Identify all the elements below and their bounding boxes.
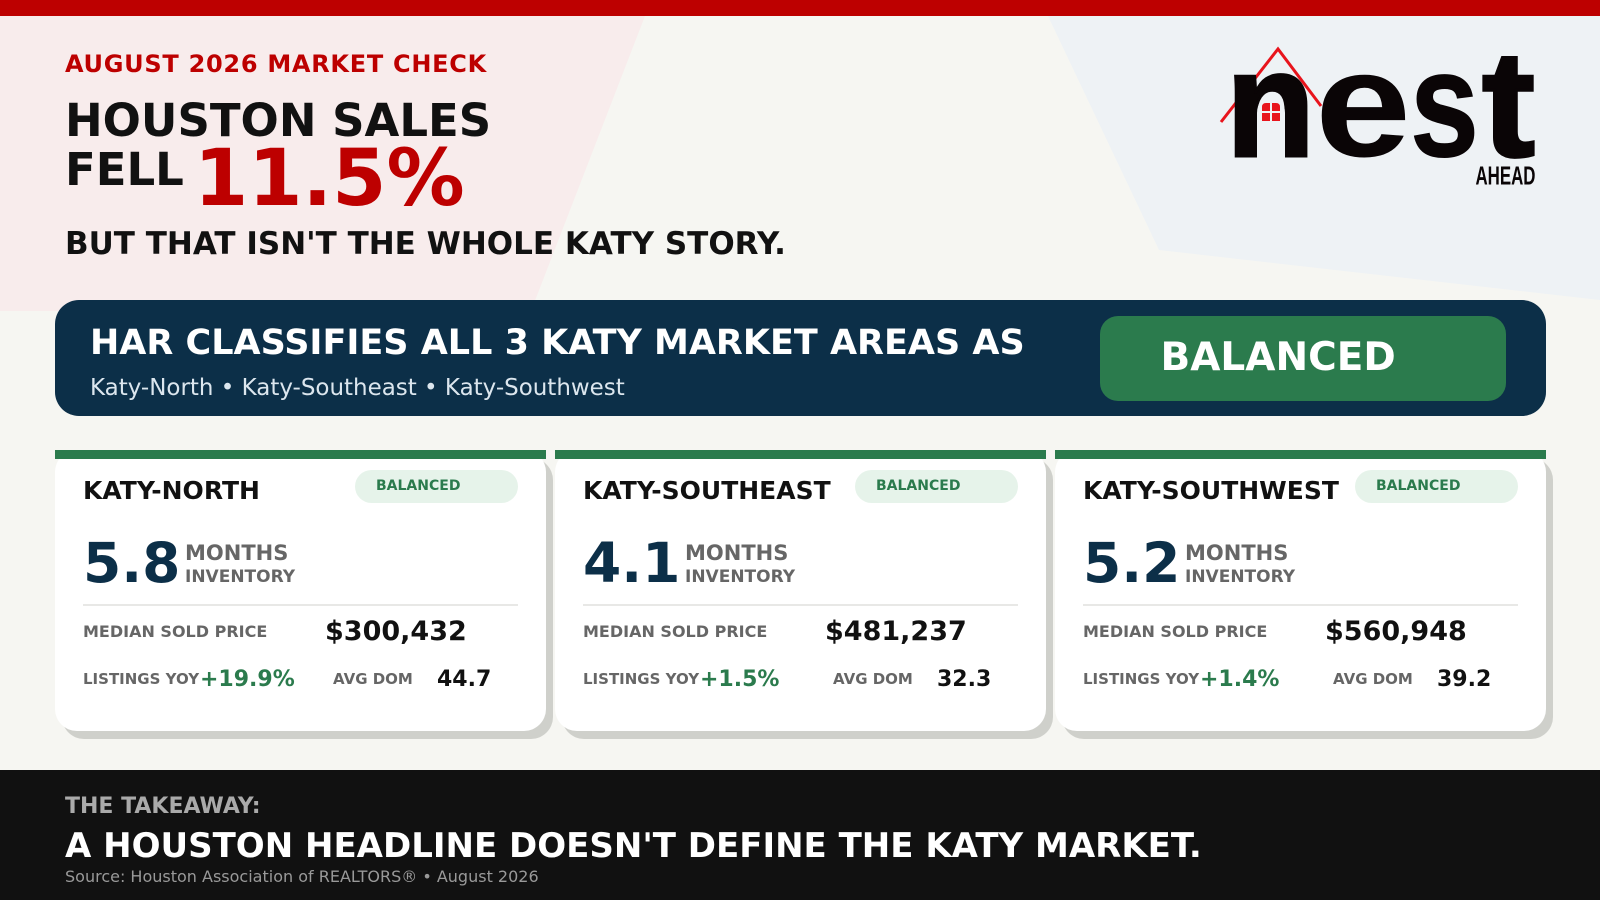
median price: [583, 605, 1018, 647]
listings yoy: LISTINGS YOY: [583, 670, 700, 688]
listings yoy: +19.9%: [200, 667, 295, 692]
average days on market: 44.7: [437, 667, 491, 692]
headline line two: FELL: [65, 143, 184, 196]
months of inventory: 4.1: [583, 531, 680, 595]
listings yoy: [1083, 667, 1279, 692]
median price: MEDIAN SOLD PRICE: [1083, 622, 1267, 641]
months of inventory: [1083, 531, 1296, 595]
balanced pill: BALANCED: [1160, 335, 1396, 380]
banner: [55, 300, 1546, 416]
top red bar: [0, 0, 1600, 16]
header text: [65, 50, 786, 262]
takeaway label: THE TAKEAWAY:: [65, 794, 261, 819]
listings yoy: [583, 667, 779, 692]
footer: [0, 770, 1600, 900]
card name: KATY-SOUTHEAST: [583, 476, 831, 505]
months of inventory: 5.2: [1083, 531, 1180, 595]
average days on market: [833, 667, 991, 692]
status pill: BALANCED: [1376, 478, 1460, 494]
status pill: [355, 470, 518, 503]
status pill: [855, 470, 1018, 503]
median price: $560,948: [1325, 616, 1467, 647]
median price: MEDIAN SOLD PRICE: [83, 622, 267, 641]
months of inventory: INVENTORY: [1185, 567, 1296, 587]
months of inventory: MONTHS: [185, 541, 288, 565]
logo tagline: AHEAD: [1476, 160, 1536, 190]
listings yoy: LISTINGS YOY: [83, 670, 200, 688]
takeaway statement: A HOUSTON HEADLINE DOESN'T DEFINE THE KATY MARKET.: [65, 826, 1202, 866]
months of inventory: MONTHS: [1185, 541, 1288, 565]
average days on market: [1333, 667, 1491, 692]
icon: door arch: [1257, 95, 1285, 160]
status pill: [1355, 470, 1518, 503]
average days on market: AVG DOM: [333, 670, 413, 688]
subheading: BUT THAT ISN'T THE WHOLE KATY STORY.: [65, 226, 786, 262]
average days on market: [333, 667, 491, 692]
status pill: BALANCED: [876, 478, 960, 494]
logo wordmark: e: [1315, 19, 1411, 188]
average days on market: 39.2: [1437, 667, 1491, 692]
median price: MEDIAN SOLD PRICE: [583, 622, 767, 641]
listings yoy: +1.4%: [1200, 667, 1279, 692]
panel: Katy-Southeast: [555, 450, 1053, 739]
months of inventory: INVENTORY: [685, 567, 796, 587]
median price: $300,432: [325, 616, 467, 647]
panel: Katy-Southwest: [1055, 450, 1553, 739]
logo wordmark: t: [1482, 19, 1535, 188]
average days on market: AVG DOM: [833, 670, 913, 688]
headline line one: HOUSTON SALES: [65, 94, 491, 147]
headline figure: 11.5%: [194, 134, 465, 224]
median price: [83, 605, 518, 647]
months of inventory: INVENTORY: [185, 567, 296, 587]
median price: $481,237: [825, 616, 967, 647]
logo: nest ahead: [1221, 19, 1536, 190]
card name: KATY-SOUTHWEST: [1083, 476, 1339, 505]
banner heading: HAR CLASSIFIES ALL 3 KATY MARKET AREAS AS: [90, 323, 1025, 363]
banner subtext: Katy-North • Katy-Southeast • Katy-Southwest: [90, 375, 625, 401]
average days on market: 32.3: [937, 667, 991, 692]
panel: Katy-North: [55, 450, 553, 739]
months of inventory: [583, 531, 796, 595]
months of inventory: MONTHS: [685, 541, 788, 565]
average days on market: AVG DOM: [1333, 670, 1413, 688]
balanced pill: [1100, 316, 1506, 401]
eyebrow: AUGUST 2026 MARKET CHECK: [65, 50, 488, 78]
card name: KATY-NORTH: [83, 476, 260, 505]
status pill: BALANCED: [376, 478, 460, 494]
median price: [1083, 605, 1518, 647]
icon: window: [1262, 103, 1280, 121]
months of inventory: [83, 531, 296, 595]
source: Source: Houston Association of REALTORS® • August 2026: [65, 867, 539, 886]
background shape: pink wedge: [0, 16, 645, 311]
listings yoy: +1.5%: [700, 667, 779, 692]
logo wordmark: n: [1226, 19, 1315, 188]
background shape: blue wedge: [1048, 16, 1600, 300]
logo wordmark: s: [1410, 19, 1479, 188]
listings yoy: LISTINGS YOY: [1083, 670, 1200, 688]
icon: roof line: [1221, 49, 1321, 122]
listings yoy: [83, 667, 295, 692]
months of inventory: 5.8: [83, 531, 180, 595]
